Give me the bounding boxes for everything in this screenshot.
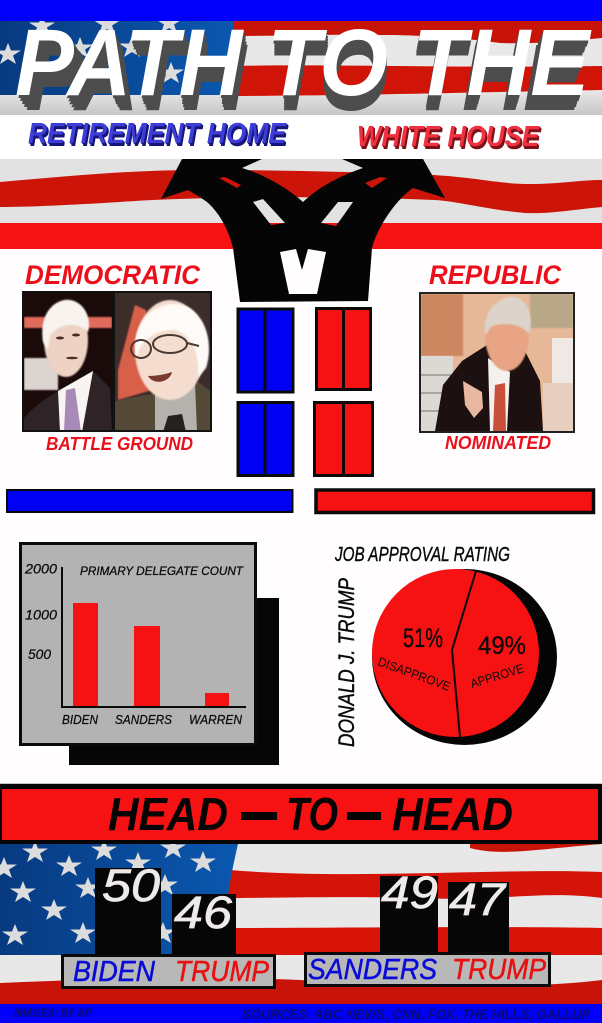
candidate bars: blue lower	[238, 402, 293, 476]
51% disapprove: DISAPPROVE	[376, 655, 452, 694]
banner text: HEAD	[392, 788, 513, 840]
axes	[62, 567, 246, 707]
chart title: PRIMARY DELEGATE COUNT	[80, 564, 245, 578]
road fork arrow	[161, 159, 445, 302]
long blue bar	[7, 490, 292, 512]
49% approve: APPROVE	[469, 661, 525, 691]
heading: Democratic: DEMOCRATIC	[25, 260, 200, 290]
long red bar	[316, 490, 594, 512]
heading: Republic: REPUBLIC	[429, 260, 561, 290]
top flag background	[0, 12, 602, 115]
middle flag background	[0, 159, 602, 223]
candidate bars: red lower	[314, 402, 372, 476]
head-to-head bar: Biden 50: 50	[102, 860, 160, 911]
heading: job approval rating: JOB APPROVAL RATING	[334, 544, 510, 566]
banner text: TO	[286, 788, 338, 840]
49% approve: 49%	[478, 632, 526, 660]
head-to-head bar: Trump 47	[448, 874, 509, 954]
subtitle: white house: WHITE HOUSE	[357, 121, 539, 153]
bar chart panel: primary delegate count	[20, 544, 279, 765]
49% approve	[469, 632, 526, 691]
head-to-head bar: Trump 46: 46	[174, 887, 233, 938]
label box: Sanders vs Trump	[306, 954, 550, 986]
y axis labels	[24, 562, 58, 662]
label box: Sanders vs Trump: SANDERS	[308, 954, 438, 986]
label box: Biden vs Trump: TRUMP	[175, 956, 270, 988]
candidate bars: blue upper	[238, 309, 293, 392]
subtitle: retirement home: RETIREMENT HOME	[28, 118, 286, 150]
banner text: HEAD	[108, 788, 228, 840]
photo: Biden and Sanders	[22, 291, 212, 432]
head-to-head bar: Trump 46	[172, 887, 236, 956]
banner text	[108, 788, 513, 840]
label box: Biden vs Trump: BIDEN	[73, 956, 155, 988]
photo: Sanders	[115, 293, 212, 432]
candidate bars: red upper	[316, 308, 370, 390]
photo: Trump	[419, 292, 575, 433]
y axis labels: 2000	[24, 562, 58, 576]
photo: Biden	[24, 293, 112, 432]
footer band	[0, 1004, 602, 1023]
footer: image credit: IMAGES: BY AP	[14, 1006, 92, 1020]
label box: Sanders vs Trump: TRUMP	[452, 954, 547, 986]
head-to-head bar: Sanders 49	[380, 867, 438, 954]
y axis labels: 500	[28, 647, 51, 662]
x axis labels	[62, 713, 243, 727]
middle white band	[0, 115, 602, 159]
title: PATH TO THE	[15, 10, 589, 116]
51% disapprove	[376, 623, 452, 694]
x axis labels: SANDERS	[115, 713, 173, 727]
bars	[73, 603, 229, 706]
head-to-head bar: Sanders 49: 49	[381, 867, 438, 918]
x axis labels: WARREN	[189, 713, 243, 727]
head-to-head bar: Biden 50	[95, 860, 161, 956]
bottom flag background	[0, 837, 602, 1004]
label: Nominated: NOMINATED	[445, 432, 551, 453]
y axis labels: 1000	[25, 608, 58, 622]
label: Battle Ground: BATTLE GROUND	[46, 433, 193, 454]
head-to-head bar: Trump 47: 47	[449, 874, 507, 925]
head-to-head banner	[0, 783, 602, 844]
solid red stripe	[0, 223, 602, 249]
x axis labels: BIDEN	[62, 713, 99, 727]
label box: Biden vs Trump	[62, 956, 274, 988]
pie chart: job approval	[372, 569, 557, 745]
heading: Donald J. Trump: DONALD J. TRUMP	[334, 578, 359, 747]
51% disapprove: 51%	[403, 623, 443, 653]
top blue band	[0, 0, 602, 21]
